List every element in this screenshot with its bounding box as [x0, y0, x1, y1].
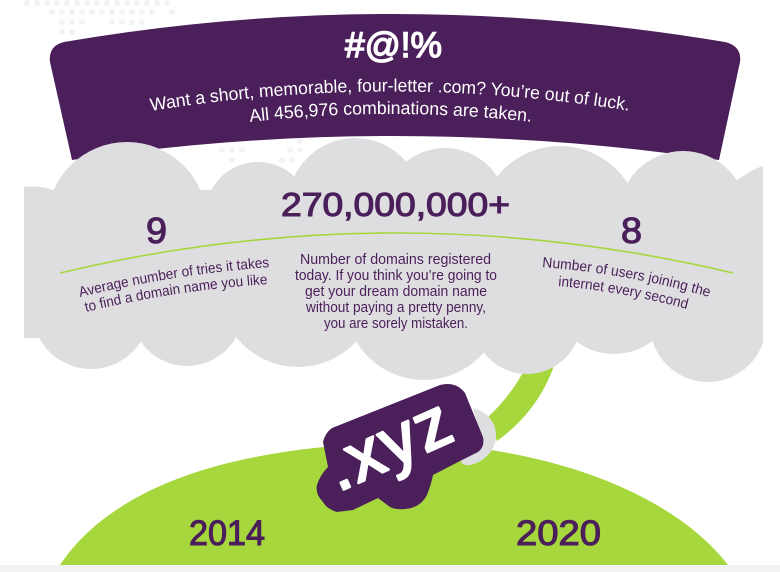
stat domains description: you are sorely mistaken.	[324, 316, 468, 332]
banner text: Want a short, memorable, four-letter .com? You’re out of luck.	[149, 78, 628, 110]
stat: 8 users: 8	[621, 210, 642, 251]
banner title: #@!%	[345, 26, 442, 65]
green tail	[487, 360, 556, 441]
green hill	[60, 443, 728, 565]
tag ring	[461, 408, 496, 465]
.xyz tag	[313, 382, 483, 512]
banner text line two: All 456,976 combinations are taken.	[250, 101, 530, 122]
stat 9 description: Average number of tries it takes	[80, 258, 269, 297]
stat 8 description: Number of users joining the	[543, 257, 710, 296]
stat: 270,000,000+ domains	[281, 186, 510, 332]
stat: 9 tries	[80, 210, 269, 312]
stat domains description: Number of domains registered	[300, 252, 491, 268]
stat domains description: today. If you think you’re going to	[295, 268, 497, 284]
stat domains description	[295, 252, 497, 332]
.xyz label: .xyz	[313, 382, 463, 506]
stat 9 description line two: to find a domain name you like	[84, 274, 267, 312]
stat 8 description line two: internet every second	[558, 276, 689, 309]
stat: 270,000,000+ domains: 270,000,000+	[281, 186, 510, 223]
banner: four-letter .com	[50, 14, 740, 160]
cloud panel	[24, 138, 766, 382]
stat domains description: get your dream domain name	[305, 284, 487, 300]
year 2020: 2020	[516, 514, 601, 553]
green curve divider	[60, 233, 733, 273]
year 2014: 2014	[189, 514, 265, 553]
stat domains description: without paying a pretty penny,	[305, 300, 486, 316]
stat: 9 tries: 9	[146, 210, 167, 251]
stat: 8 users	[543, 210, 710, 309]
